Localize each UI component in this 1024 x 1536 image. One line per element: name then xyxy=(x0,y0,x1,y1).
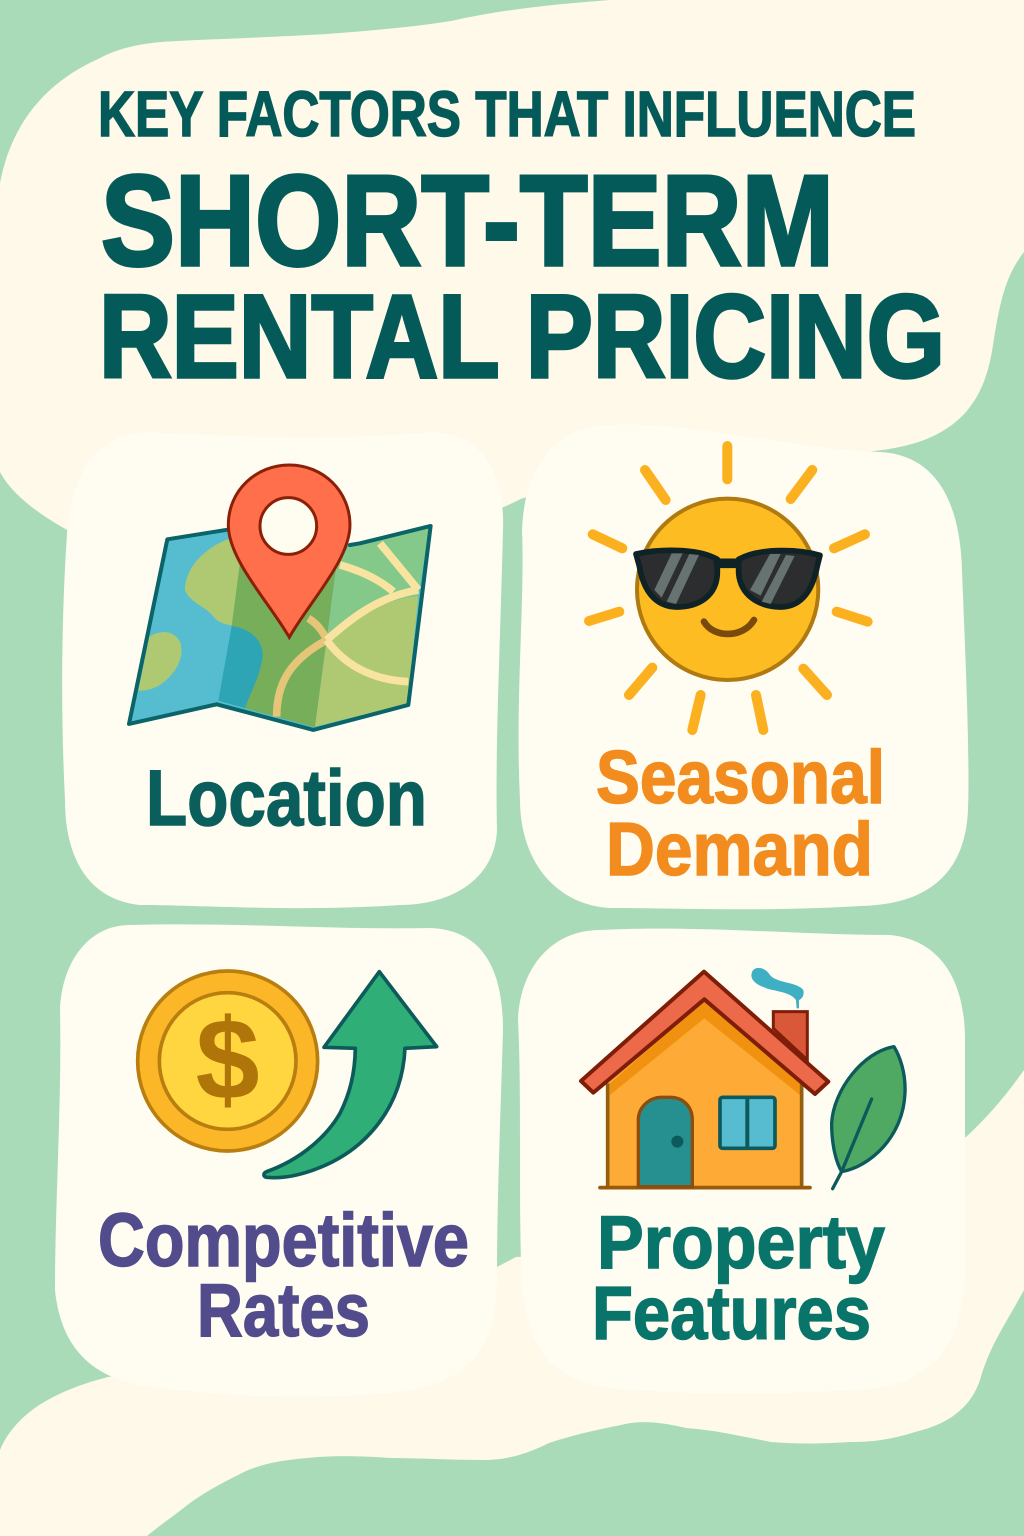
bottom background blob xyxy=(0,1070,1024,1536)
panel: seasonal demand xyxy=(519,424,968,909)
label: competitive rates: Competitive xyxy=(98,1198,469,1282)
title line: short-term: SHORT-TERM xyxy=(101,149,834,293)
icon: coin and rising arrow xyxy=(138,971,437,1178)
panel: property features xyxy=(518,929,965,1394)
label: property features: Features xyxy=(592,1271,871,1355)
label: competitive rates: Rates xyxy=(197,1268,370,1352)
label: property features: Property xyxy=(597,1200,885,1284)
competitive rates card background xyxy=(55,924,503,1397)
label: seasonal demand xyxy=(596,735,885,891)
label: property features xyxy=(592,1200,885,1355)
icon: sun with sunglasses xyxy=(589,446,868,730)
label: seasonal demand: Seasonal xyxy=(596,735,885,819)
icon: house and leaf xyxy=(581,968,905,1189)
location card background xyxy=(62,432,503,908)
property features card background xyxy=(518,929,965,1394)
panel: competitive rates xyxy=(55,924,503,1397)
panel: location xyxy=(62,432,503,908)
label: competitive rates xyxy=(98,1198,469,1352)
seasonal demand card background xyxy=(519,424,968,909)
icon: folded map with pin xyxy=(129,465,431,730)
title xyxy=(98,78,945,403)
icon: coin and rising arrow: $ xyxy=(196,996,260,1124)
label: seasonal demand: Demand xyxy=(606,807,873,891)
top background blob xyxy=(0,0,1024,560)
label: location: Location xyxy=(146,753,427,842)
